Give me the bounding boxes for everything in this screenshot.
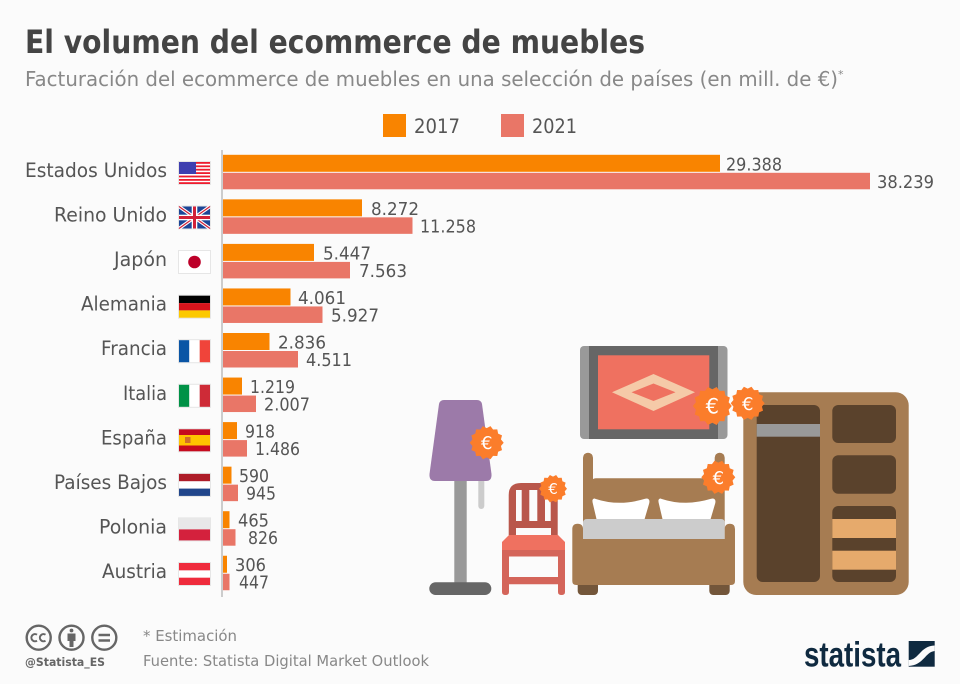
row: Francia xyxy=(101,333,352,371)
row: Países Bajos: Países Bajos xyxy=(54,471,167,494)
row: Alemania: 4.061 xyxy=(298,289,346,309)
row: Países Bajos: 945 xyxy=(246,485,276,505)
row: Alemania xyxy=(81,288,379,326)
row: España xyxy=(101,422,300,460)
icon: flag Germany xyxy=(178,295,211,319)
illustration: picture on the wall xyxy=(580,346,728,439)
icon: flag Poland xyxy=(178,517,211,541)
row: Polonia: Polonia xyxy=(99,515,167,538)
footnote: * Estimación xyxy=(143,627,237,645)
icon: euro badge bed: € xyxy=(713,468,724,489)
icon: flag Spain xyxy=(178,428,211,452)
row: Reino Unido: 11.258 xyxy=(420,217,476,237)
icon: creative commons licence xyxy=(27,626,116,650)
row: Estados Unidos: Estados Unidos xyxy=(25,159,167,182)
icon: euro badge wardrobe: € xyxy=(742,394,753,415)
icon: euro badge picture xyxy=(693,387,732,425)
icon: flag UK xyxy=(178,206,211,230)
source: Fuente: Statista Digital Market Outlook xyxy=(143,652,429,670)
icon: euro badge bed xyxy=(701,461,735,494)
subtitle footnote mark: * xyxy=(838,68,844,81)
icon: euro badge chair: € xyxy=(548,480,558,498)
row: Francia: Francia xyxy=(101,337,167,360)
row: España: 1.486 xyxy=(255,440,300,460)
handle: @Statista_ES xyxy=(25,655,105,670)
row: Italia: 2.007 xyxy=(264,396,310,416)
icon: euro badge lamp xyxy=(470,426,504,459)
icon: flag Italy xyxy=(178,384,211,408)
row: Reino Unido: 8.272 xyxy=(371,200,419,220)
row: Reino Unido xyxy=(54,199,476,237)
icon: euro badge wardrobe xyxy=(731,387,765,420)
row: Austria xyxy=(102,556,269,594)
row: España: 918 xyxy=(245,423,275,443)
icon: euro badge picture: € xyxy=(706,394,719,418)
row: Polonia: 826 xyxy=(248,529,278,549)
row: Italia xyxy=(123,378,310,416)
logo: statista: statista xyxy=(804,636,901,674)
illustration: bed xyxy=(572,453,735,595)
icon: flag Austria xyxy=(178,562,211,586)
row: Alemania: Alemania xyxy=(81,293,167,316)
row: Austria: 447 xyxy=(239,574,269,594)
icon: flag France xyxy=(178,339,211,363)
icon: euro badge lamp: € xyxy=(481,433,492,454)
row: Reino Unido: Reino Unido xyxy=(54,204,167,226)
row: Austria: 306 xyxy=(235,556,266,576)
row: Alemania: 5.927 xyxy=(331,306,379,326)
icon: flag USA xyxy=(178,161,211,185)
legend: 2017 xyxy=(414,115,460,138)
legend xyxy=(383,114,577,138)
title: El volumen del ecommerce de muebles xyxy=(25,23,645,61)
row: Polonia: 465 xyxy=(238,512,269,532)
row: Estados Unidos: 29.388 xyxy=(726,155,782,175)
row: Italia: Italia xyxy=(123,382,167,405)
subtitle: Facturación del ecommerce de muebles en una selección de países (en mill. de €) xyxy=(25,67,838,91)
row: Japón xyxy=(112,244,407,282)
row: Japón: Japón xyxy=(112,248,167,271)
row: Austria: Austria xyxy=(102,560,167,583)
illustration: floor lamp xyxy=(429,400,492,595)
row: Francia: 2.836 xyxy=(278,334,326,354)
row: Polonia xyxy=(99,511,278,549)
legend: 2021 xyxy=(532,115,577,138)
icon: euro badge chair xyxy=(539,475,567,502)
row: Estados Unidos: 38.239 xyxy=(877,173,934,193)
icon: flag Netherlands xyxy=(178,473,211,497)
row: Estados Unidos xyxy=(25,155,934,193)
row: Países Bajos xyxy=(54,467,276,505)
row: Países Bajos: 590 xyxy=(239,467,269,487)
bar chart xyxy=(25,155,934,594)
row: Japón: 7.563 xyxy=(359,262,407,282)
illustration: chair xyxy=(502,483,565,595)
row: Francia: 4.511 xyxy=(306,351,352,371)
icon: flag Japan xyxy=(178,250,211,274)
illustration: wardrobe xyxy=(743,392,909,595)
row: Italia: 1.219 xyxy=(250,378,295,398)
row: España: España xyxy=(101,426,167,449)
row: Japón: 5.447 xyxy=(323,244,371,264)
